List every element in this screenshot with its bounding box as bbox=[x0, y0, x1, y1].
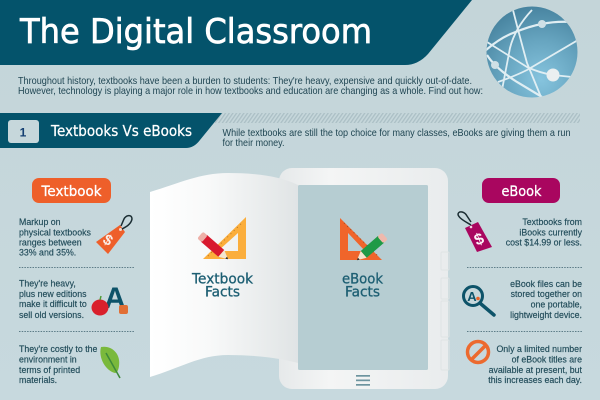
icon: orange price tag: $ bbox=[100, 231, 116, 250]
section description bbox=[222, 128, 571, 149]
intro text: Throughout history, textbooks have been a burden to students: They're heavy, expensive and quickly out-of-date. bbox=[18, 76, 472, 87]
fact: heavy: sell old versions. bbox=[19, 310, 84, 320]
badge: Textbook: Textbook bbox=[41, 184, 102, 200]
tablet side buttons bbox=[441, 252, 449, 370]
icon: menu button bbox=[356, 375, 370, 386]
fact: iBooks price: iBooks currently bbox=[519, 228, 583, 238]
section description: for their money. bbox=[222, 138, 284, 149]
icon: magenta price tag: $ bbox=[472, 230, 487, 249]
fact: environment bbox=[19, 344, 98, 385]
dotted dividers left bbox=[19, 268, 134, 332]
icon: network globe bbox=[486, 6, 578, 98]
intro text: However, technology is playing a major role in how textbooks and education are changing as a whole. Find out how: bbox=[18, 86, 483, 97]
number badge: 1 bbox=[20, 126, 27, 140]
icon: set square and green pencil bbox=[340, 218, 388, 264]
dotted dividers right bbox=[467, 268, 582, 332]
fact: heavy: plus new editions bbox=[19, 289, 87, 299]
icon: prohibition sign bbox=[468, 342, 488, 362]
fact: limited titles bbox=[488, 344, 583, 385]
fact: heavy: They're heavy, bbox=[19, 278, 76, 288]
fact: markup: physical textbooks bbox=[19, 228, 91, 238]
tablet screen bbox=[298, 185, 428, 370]
section heading bar: Textbooks Vs eBooks bbox=[50, 122, 192, 140]
tablet label: Facts bbox=[345, 284, 380, 300]
fact: iBooks price bbox=[506, 217, 583, 248]
icon: magnifier with letter A: A bbox=[467, 289, 477, 304]
fact: iBooks price: cost $14.99 or less. bbox=[506, 238, 582, 248]
fact: portable: eBook files can be bbox=[510, 279, 582, 289]
badge: Textbook bbox=[32, 178, 111, 203]
title banner: The Digital Classroom bbox=[19, 12, 372, 52]
fact: environment: materials. bbox=[19, 375, 57, 385]
icon: magnifier with letter A bbox=[464, 286, 494, 315]
title banner bbox=[0, 0, 472, 65]
fact: environment: terms of printed bbox=[19, 365, 80, 375]
badge: eBook: eBook bbox=[502, 184, 542, 200]
fact: iBooks price: Textbooks from bbox=[522, 217, 582, 227]
panel: textbook column bbox=[19, 178, 132, 385]
intro text bbox=[18, 76, 483, 97]
fact: environment: environment in bbox=[19, 354, 77, 364]
book label: Textbook bbox=[191, 272, 254, 288]
fact: heavy: make it difficult to bbox=[19, 299, 87, 309]
icon: green leaf bbox=[100, 347, 120, 378]
fact: portable: stored together on bbox=[511, 289, 582, 299]
fact: portable bbox=[510, 279, 582, 320]
fact: markup: ranges between bbox=[19, 238, 82, 248]
icon: magenta price tag bbox=[458, 212, 492, 252]
panel: ebook column bbox=[458, 178, 583, 385]
icon: apple and letter A: A bbox=[104, 282, 126, 315]
icon: orange price tag bbox=[96, 216, 132, 254]
badge: eBook bbox=[482, 178, 560, 203]
panel: tablet device bbox=[279, 168, 449, 389]
fact: portable: one portable, bbox=[531, 300, 582, 310]
fact: limited titles: this increases each day. bbox=[488, 375, 582, 385]
book label bbox=[191, 272, 254, 300]
tablet label bbox=[342, 272, 384, 300]
fact: limited titles: available at present, but bbox=[489, 365, 583, 375]
fact: limited titles: Only a limited number bbox=[496, 344, 582, 354]
icon: set square and red pencil bbox=[197, 217, 246, 263]
book label: Facts bbox=[205, 284, 240, 300]
icon: apple and letter A bbox=[92, 282, 128, 316]
fact: markup bbox=[19, 217, 91, 258]
number badge bbox=[8, 120, 39, 143]
fact: markup: Markup on bbox=[19, 217, 61, 227]
fact: markup: 33% and 35%. bbox=[19, 248, 76, 258]
tablet label: eBook bbox=[342, 272, 384, 288]
panel: open book page bbox=[150, 173, 298, 377]
fact: portable: lightweight device. bbox=[510, 310, 582, 320]
fact: environment: They're costly to the bbox=[19, 344, 98, 354]
fact: limited titles: of eBook titles are bbox=[512, 354, 582, 364]
fact: heavy bbox=[19, 278, 87, 320]
hatched strip bbox=[215, 113, 580, 123]
section heading bar bbox=[0, 113, 222, 148]
